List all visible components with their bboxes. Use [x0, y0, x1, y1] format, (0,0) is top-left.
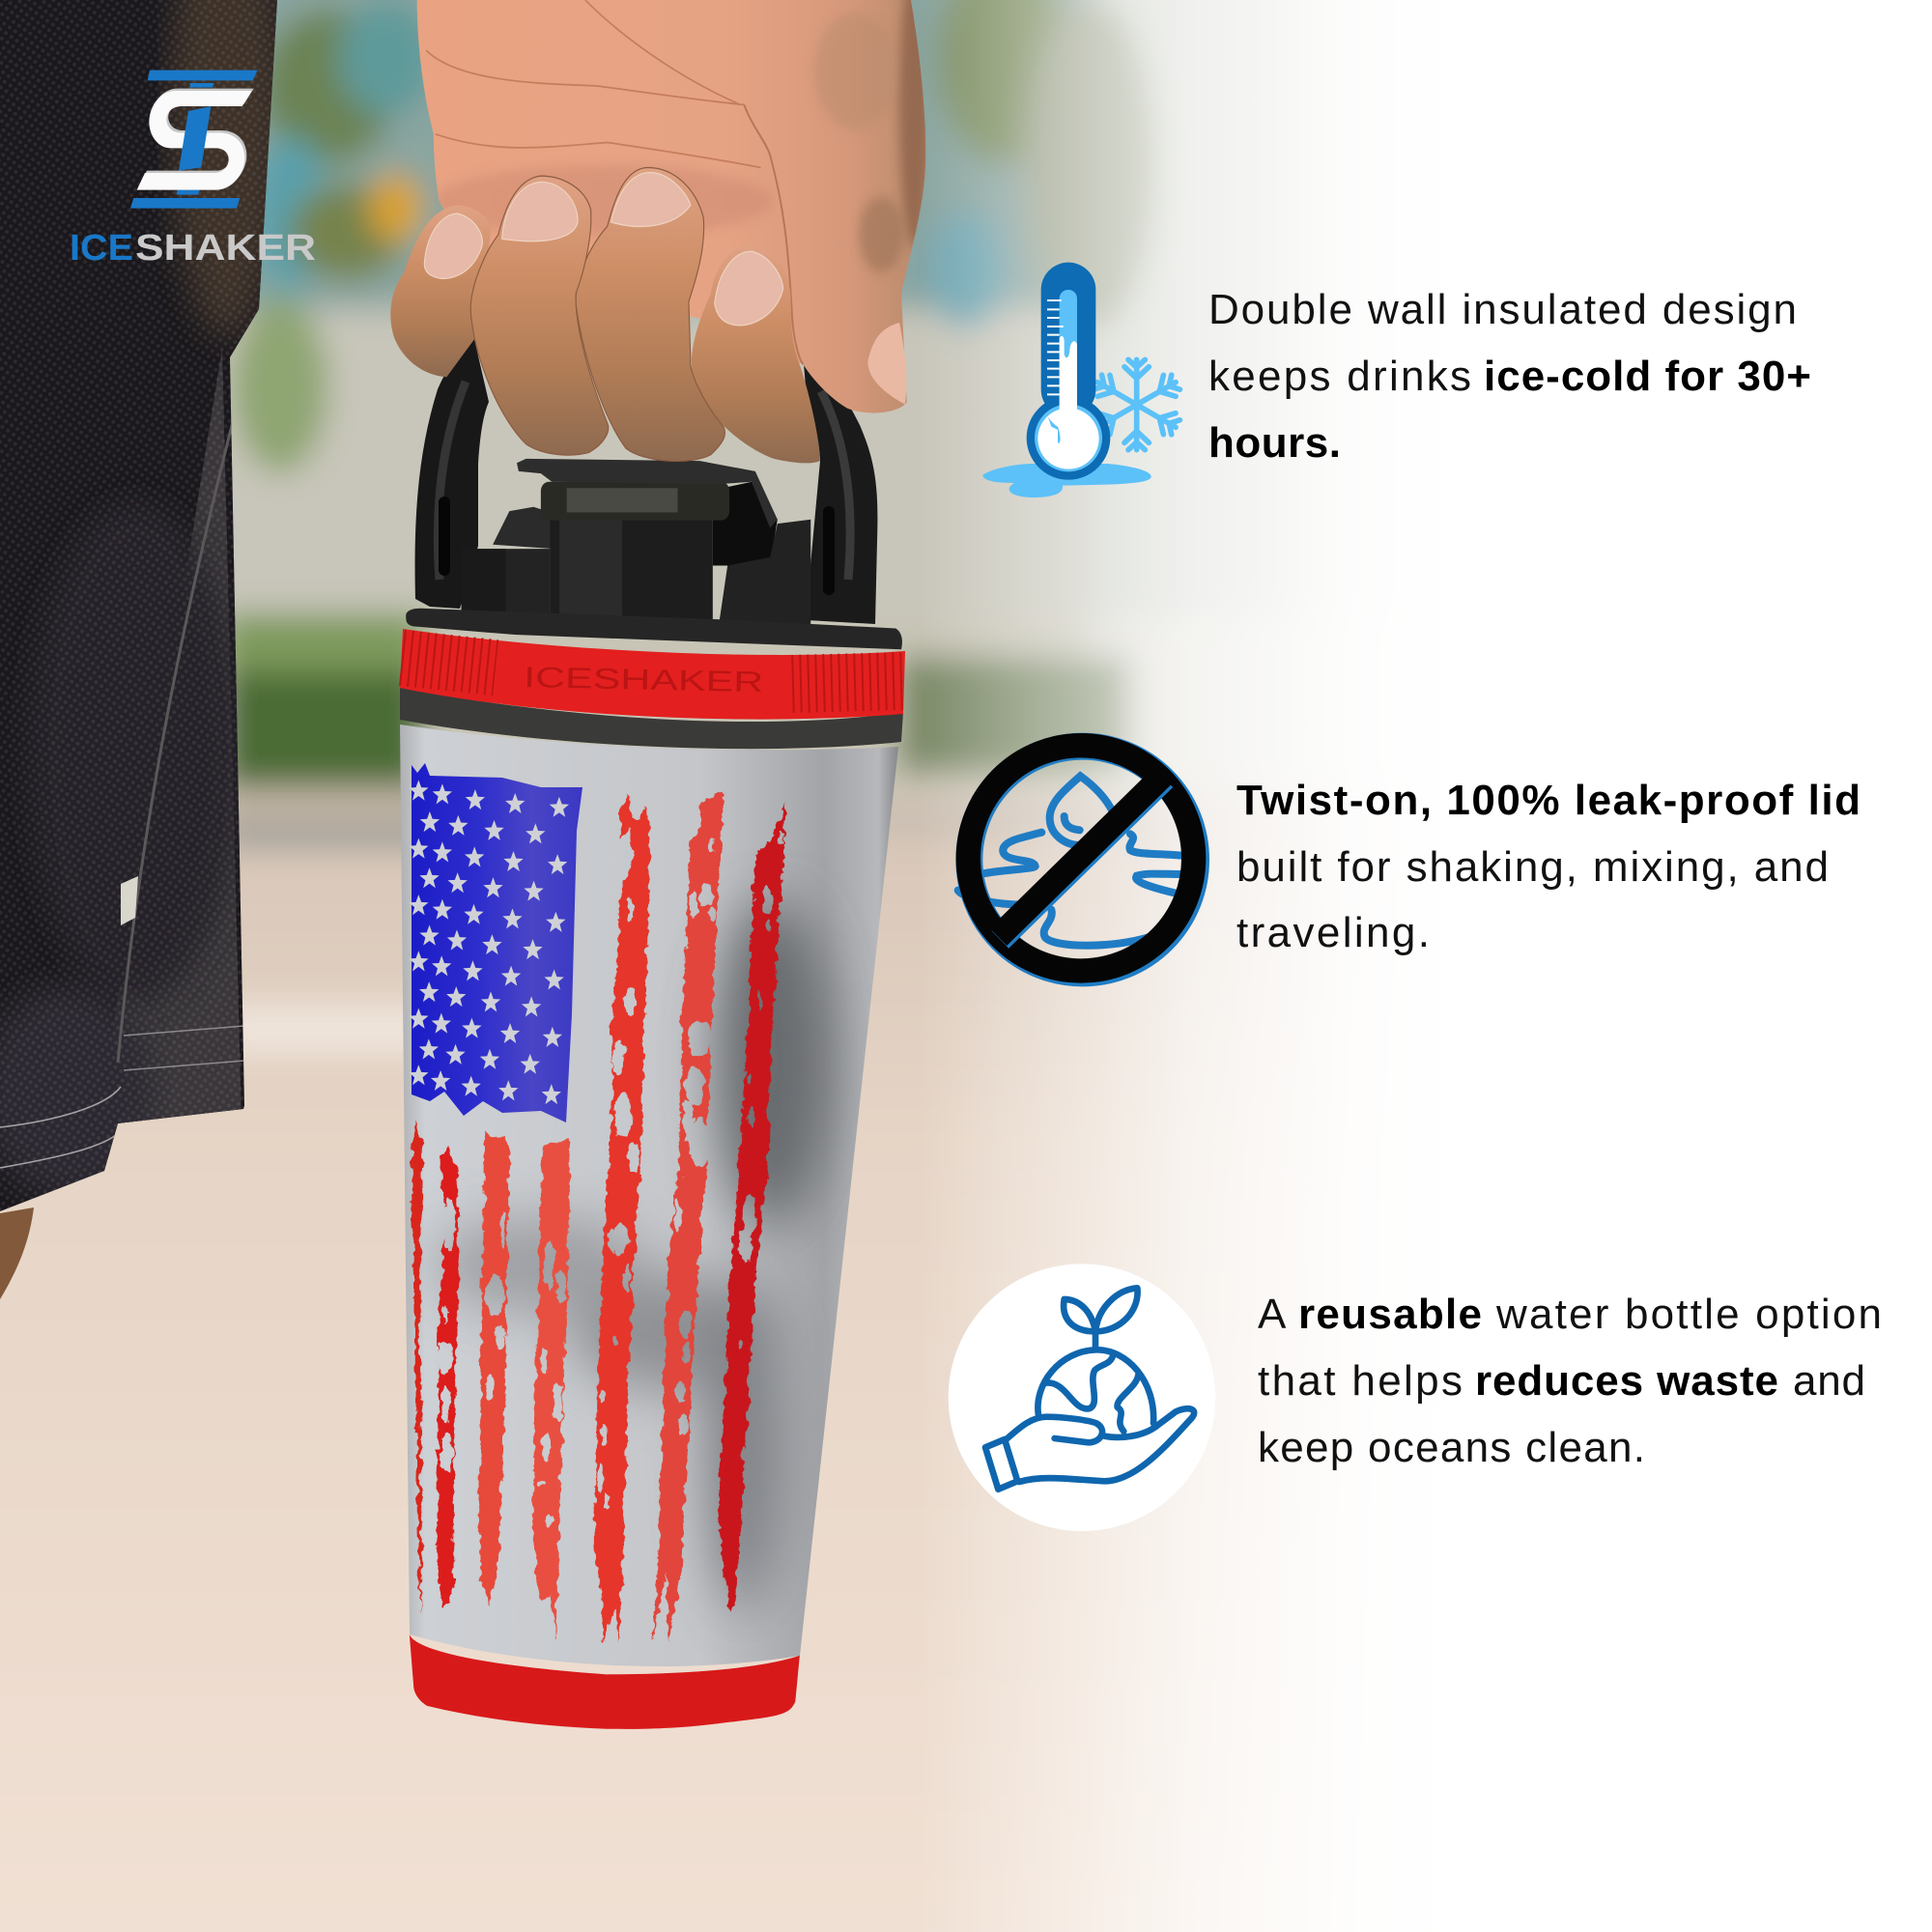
finger nails [424, 173, 783, 326]
finger 4 [692, 245, 820, 463]
logo wordmark [70, 228, 316, 269]
flag canton [409, 763, 582, 1122]
red lid band [400, 629, 905, 720]
feature 2: text: built for shaking, mixing, and [1236, 843, 1829, 891]
feature 1: text: hours. [1208, 419, 1341, 467]
feature 3: text: keep oceans clean. [1258, 1424, 1645, 1471]
feature 3: reuse icon [949, 1264, 1215, 1531]
feature 2: text [1236, 777, 1861, 956]
feature 1: text: Double wall insulated design [1208, 286, 1797, 333]
flag stars [409, 781, 569, 1104]
feature 2: text: traveling. [1236, 909, 1430, 956]
lid logo text: ICESHAKER [524, 662, 763, 698]
feature 1: text [1208, 286, 1811, 467]
feature 3: text: A [1258, 1291, 1287, 1338]
logo [70, 71, 316, 269]
hand shading [434, 0, 929, 272]
bottle body [400, 724, 898, 1666]
feature 1: text: ice-cold for 30+ [1484, 353, 1811, 400]
feature 2: text: Twist-on, 100% leak-proof lid [1236, 777, 1861, 824]
bottle handle [415, 339, 877, 624]
logo wordmark: ICE [70, 228, 133, 269]
feature 3: text: that helps [1258, 1357, 1463, 1405]
feature 3: text: reduces waste [1475, 1357, 1778, 1405]
back of hand and palm [417, 0, 925, 412]
leg [0, 1208, 34, 1299]
bottle [400, 339, 905, 1729]
feature 3: text: reusable [1298, 1291, 1482, 1338]
flag stripes upper [609, 791, 786, 1179]
finger 2 [470, 176, 609, 455]
logo wordmark: SHAKER [135, 228, 316, 269]
body shading [435, 898, 831, 1613]
feature 1: insulated icon [982, 263, 1181, 497]
feature 3: text: and [1793, 1357, 1865, 1405]
base [410, 1634, 800, 1729]
hand [390, 0, 929, 463]
finger 3 [576, 167, 724, 461]
feature 3: text [1258, 1291, 1882, 1471]
sealing ring [400, 688, 903, 749]
palm creases [426, 0, 804, 364]
feature 2: leak-proof icon [958, 746, 1196, 973]
flag stripes lower [412, 1120, 768, 1643]
logo mark [130, 71, 258, 209]
shorts [0, 0, 290, 1217]
thumb nail [867, 323, 906, 405]
feature 1: text: keeps drinks [1208, 353, 1471, 400]
lid and spout [406, 459, 902, 649]
feature 3: text: water bottle option [1495, 1291, 1882, 1338]
pinky finger [390, 206, 491, 377]
